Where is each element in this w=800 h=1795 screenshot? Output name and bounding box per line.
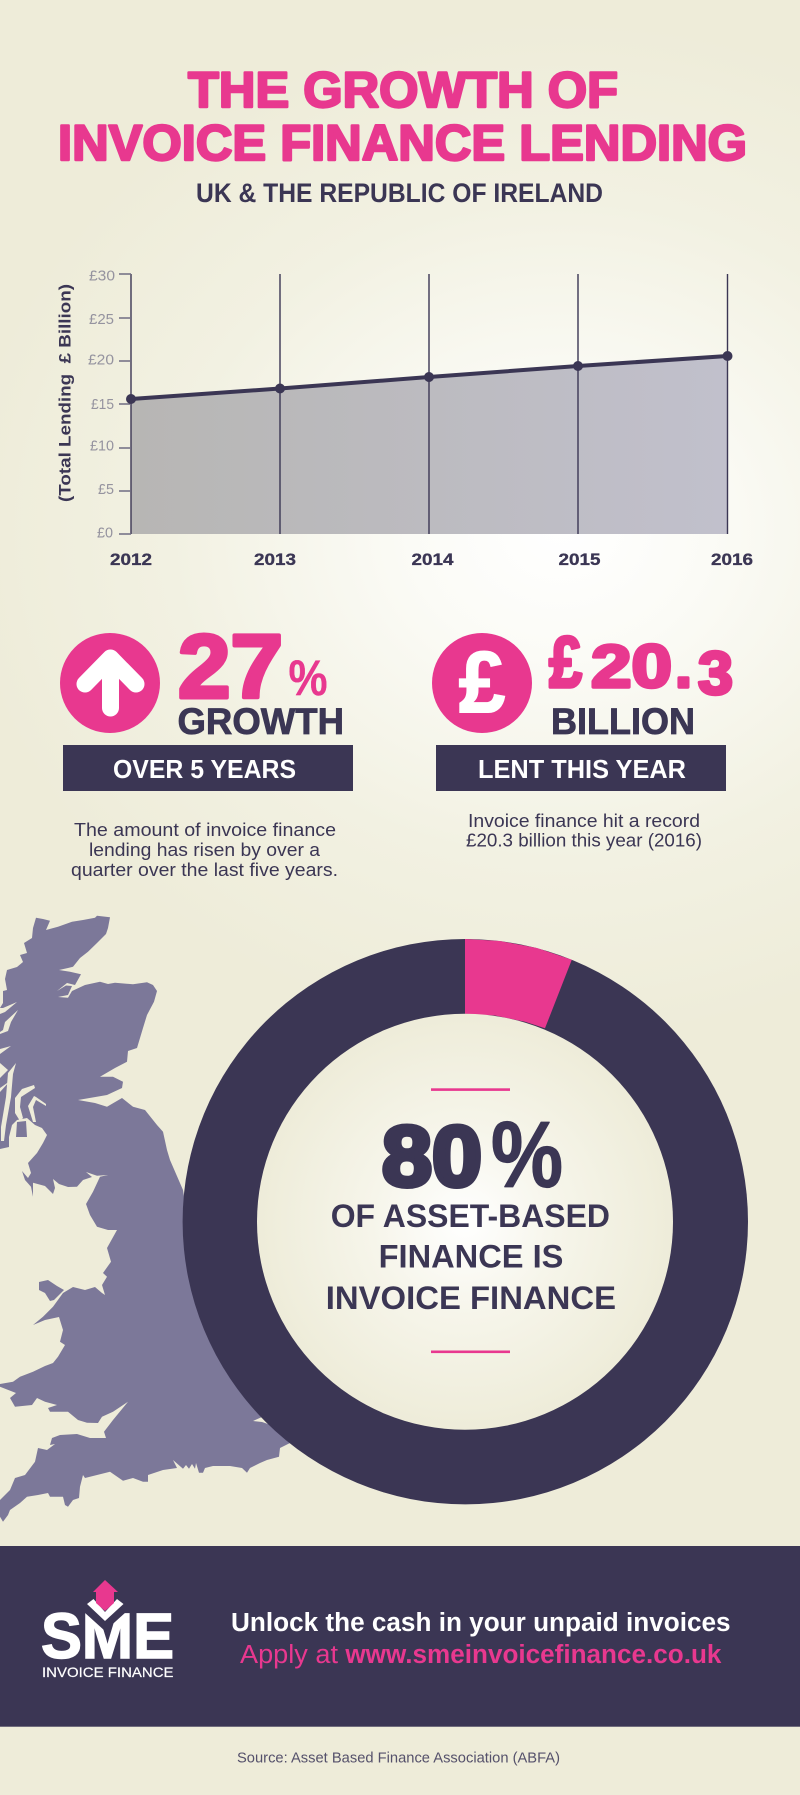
x axis year labels: 2015 xyxy=(558,551,600,569)
x axis year labels: 2016 xyxy=(711,551,753,569)
y axis tick labels: £20 xyxy=(88,352,114,368)
application link: www.smeinvoicefinance.co.uk xyxy=(344,1641,722,1669)
x axis year labels xyxy=(110,551,753,569)
donut caption xyxy=(326,1198,616,1316)
chart axes and gridlines xyxy=(119,274,728,534)
description text xyxy=(466,810,702,850)
donut caption: INVOICE FINANCE xyxy=(326,1280,616,1316)
y axis tick labels: £0 xyxy=(97,526,113,542)
panel: 27% growth xyxy=(60,618,353,880)
stat label: billion: BILLION xyxy=(551,700,695,742)
description text: £20.3 billion this year (2016) xyxy=(466,830,702,850)
stat: 20.3: . xyxy=(675,633,692,700)
description text: The amount of invoice finance xyxy=(74,819,336,840)
title: THE GROWTH OF xyxy=(188,62,618,118)
stat: 20.3: £ xyxy=(549,623,582,703)
stat: 20.3: 20 xyxy=(591,633,672,700)
source note: Source: Asset Based Finance Association (ABFA) xyxy=(237,1750,560,1766)
logo: SME Invoice Finance: INVOICE FINANCE xyxy=(42,1664,174,1680)
stat: 27 percent xyxy=(178,618,328,718)
donut ring xyxy=(183,939,748,1504)
title xyxy=(58,62,747,171)
y axis title: (Total Lending £ Billion) xyxy=(56,284,74,502)
donut pink segment xyxy=(465,939,572,1028)
description text xyxy=(71,819,338,880)
x axis year labels: 2012 xyxy=(110,551,152,569)
map detail: sea lochs and inlets xyxy=(0,1002,46,1141)
logo: SME Invoice Finance xyxy=(41,1580,174,1680)
stat: 27 percent: 27 xyxy=(178,618,283,718)
description text: lending has risen by over a xyxy=(89,839,321,860)
title: INVOICE FINANCE LENDING xyxy=(58,115,747,171)
line chart: total lending 2012-2016 xyxy=(56,268,753,569)
y axis tick labels: £25 xyxy=(89,312,114,328)
footer band xyxy=(0,1546,800,1727)
accent rule bottom xyxy=(431,1350,510,1353)
stat: 80 percent: % xyxy=(491,1102,563,1207)
banner: lent this year: LENT THIS YEAR xyxy=(478,754,686,784)
banner: over 5 years: OVER 5 YEARS xyxy=(113,754,296,784)
call to action: Unlock the cash in your unpaid invoices xyxy=(231,1609,731,1637)
donut caption: FINANCE IS xyxy=(379,1238,563,1274)
logo: SME Invoice Finance: SME xyxy=(41,1600,174,1672)
map detail: the Wash xyxy=(253,1417,268,1424)
stat: 80 percent: 80 xyxy=(382,1110,482,1204)
stat: 27 percent: % xyxy=(288,650,328,706)
icon: pound sign: £ xyxy=(459,635,505,731)
data line xyxy=(126,351,732,404)
map detail: islands xyxy=(16,1121,64,1301)
subtitle: UK & THE REPUBLIC OF IRELAND xyxy=(196,178,603,208)
y axis tick labels: £30 xyxy=(89,268,115,284)
y axis tick labels: £5 xyxy=(98,482,114,498)
icon: up arrow xyxy=(60,633,160,733)
chart area fill xyxy=(131,356,728,534)
y axis tick labels: £15 xyxy=(91,397,114,413)
x axis year labels: 2014 xyxy=(412,551,454,569)
accent rule top xyxy=(431,1088,510,1091)
banner: lent this year xyxy=(436,745,726,791)
stat label: growth: GROWTH xyxy=(178,700,344,742)
donut caption: OF ASSET-BASED xyxy=(331,1198,610,1234)
description text: quarter over the last five years. xyxy=(71,859,338,880)
y axis tick labels xyxy=(88,268,115,542)
map: Great Britain xyxy=(0,916,290,1522)
description text: Invoice finance hit a record xyxy=(468,810,700,831)
banner: over 5 years xyxy=(63,745,353,791)
application link: Apply at xyxy=(240,1641,338,1669)
panel: 20.3 billion lent xyxy=(432,623,733,850)
donut chart xyxy=(183,939,748,1504)
stat: 20.3: 3 xyxy=(698,640,733,707)
donut centre xyxy=(257,1014,673,1430)
icon: pound sign xyxy=(432,633,532,733)
y axis tick labels: £10 xyxy=(90,438,114,454)
x axis year labels: 2013 xyxy=(254,551,296,569)
